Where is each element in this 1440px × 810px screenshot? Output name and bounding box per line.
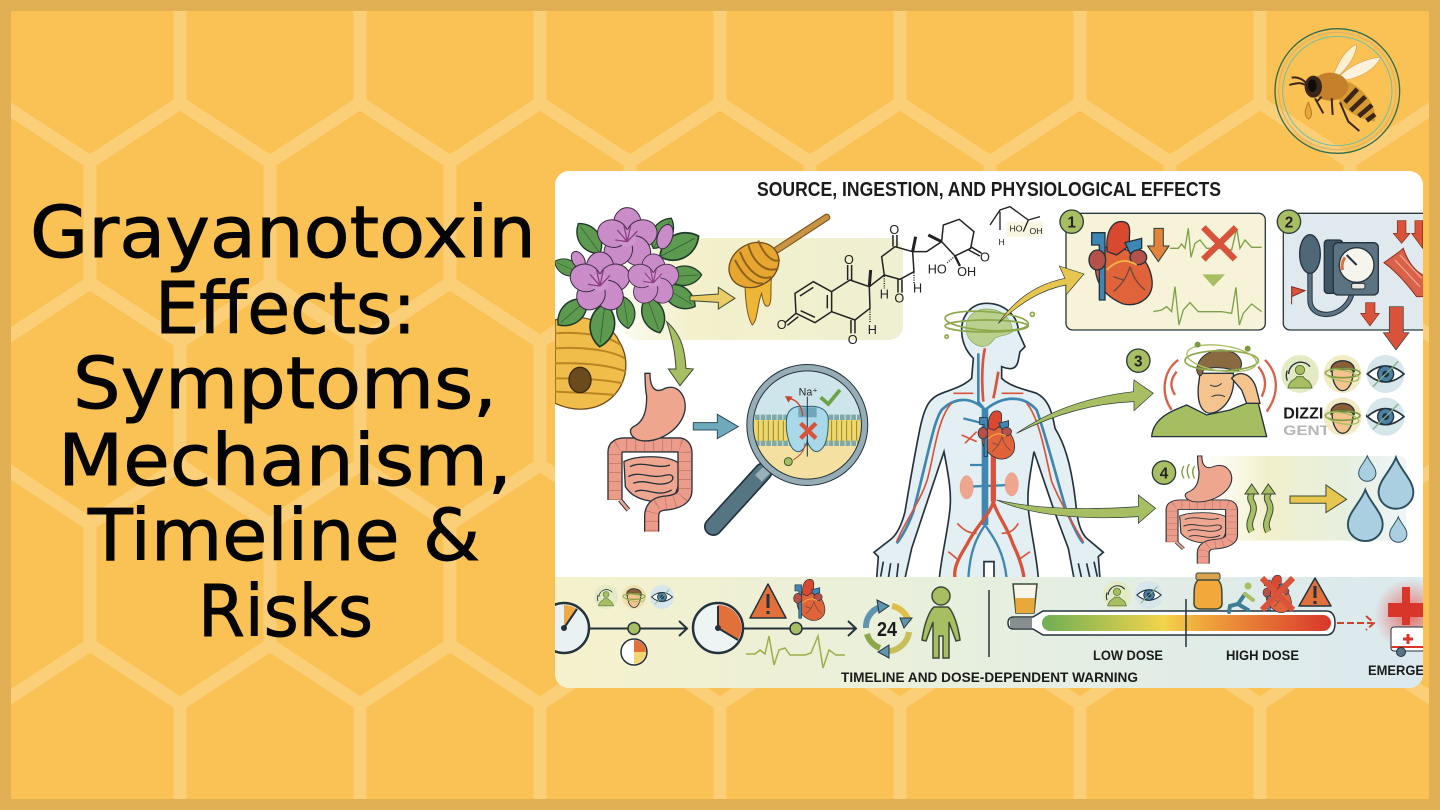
emergency icon [1374,579,1440,656]
labels: EMERGE [1368,662,1424,678]
nausea waves [1182,464,1195,478]
hand fingers [881,562,1097,578]
timeline dot 2 [790,622,802,634]
recovered person [922,587,960,658]
small chemical fragment: OH [1030,226,1042,236]
dashed emergency arrow [1337,616,1374,630]
title: Symptoms, [73,342,497,425]
ecg bottom [1153,287,1262,325]
timeline heart [794,579,825,620]
icon: magnifier with sodium channel: Na⁺ [799,387,818,399]
tube [1310,270,1352,314]
badge 2 [1277,210,1301,233]
badge 4 [1152,461,1176,484]
badge 3: 3 [1134,353,1143,370]
early symptom icons [594,585,674,609]
logo: bee in circle [1275,29,1400,153]
chemical labels: H [880,287,889,301]
timeline arrow 1 [590,621,687,636]
arrow: flower to honey [690,287,735,309]
gauge [1324,240,1343,293]
chemical labels: H [913,282,922,296]
wavy arrows [1245,484,1275,532]
bulb [1300,235,1320,273]
24 hour cycle: 24 [877,619,898,641]
small chemical fragment: HO [1010,224,1023,234]
body kidneys [960,473,1018,499]
chemical labels: O [894,292,904,306]
icon: digestive tract [615,373,685,532]
icon: rhododendron flowers [551,208,704,348]
yellow arrow [1290,485,1347,513]
body heart [978,411,1015,459]
panel 1: heart rate [1066,213,1265,330]
arrow: body to gut [997,495,1156,523]
symptom label fragments: & [1365,405,1375,421]
chemical labels: O [980,250,990,264]
chemical structure: grayanotoxin [785,219,982,333]
symptom label fragments [1283,405,1375,438]
chemical labels: H [868,323,877,337]
small chemical fragment: H [999,237,1005,247]
chemical labels: O [889,223,899,237]
badge 1: 1 [1067,214,1076,231]
symptom icons second row [1324,398,1405,436]
big down arrow [1383,307,1409,350]
dizziness halo [944,309,1034,338]
icon: glass of honey water [1013,584,1037,613]
red cross [1203,227,1236,259]
small pie clock [621,639,647,665]
title: Effects: [155,267,416,350]
blood vessels [897,348,1083,578]
muscle [1384,248,1427,297]
arrow: flower to stomach [667,322,693,386]
arrow: body to dizziness [1017,380,1153,433]
icon: collapsing person [1229,582,1253,612]
brain [966,309,1013,347]
symptom label fragments: DIZZI [1283,405,1323,422]
chemical labels: OH [957,265,976,279]
icon: intestines small [1172,456,1232,564]
human body figure [874,303,1103,578]
icon: magnifier with sodium channel [713,368,865,527]
heading: source ingestion physiological effects: SOURCE, INGESTION, AND PHYSIOLOGICAL EFFECTS [757,179,1221,201]
warning triangle [750,584,786,618]
source and mechanism illustrations [551,208,990,532]
dose divider [1185,599,1187,647]
icon: heart [1089,222,1152,305]
illustration: dizzy person [1152,341,1276,437]
symptom label fragments: GENT [1283,422,1330,438]
title: Grayanotoxin [30,191,536,274]
clock 1 [539,603,589,653]
badge 4: 4 [1160,465,1169,482]
small chemical fragment [990,207,1043,247]
body silhouette [874,303,1103,578]
warning triangle high dose [1299,578,1331,606]
title: Timeline & [87,494,480,577]
title: Risks [198,570,373,653]
chemical labels: O [777,318,787,332]
symptom icons [1281,355,1405,393]
dose thermometer [1008,611,1335,635]
flag [1292,287,1305,304]
icon: honey dipper [721,217,827,325]
title: Mechanism, [58,419,512,502]
chemical labels: O [848,333,858,347]
ecg top [1170,228,1262,257]
title [30,191,536,653]
down triangle [1202,274,1225,287]
icon: honey jar [1194,573,1222,609]
icon: beehive [555,317,626,409]
labels [841,647,1424,685]
divider [988,590,990,657]
badge 1 [1060,210,1083,233]
badge 3 [1127,349,1150,372]
panel: timeline and dose warning [539,573,1440,688]
badge 2: 2 [1285,214,1293,231]
arrow: gut to channel [693,414,738,439]
icon: heart crossed out [1262,575,1293,613]
water drops [1348,456,1413,542]
labels: LOW DOSE [1093,647,1163,663]
labels: TIMELINE AND DOSE-DEPENDENT WARNING [841,669,1138,685]
low dose icons [1103,581,1163,609]
timeline dot 1 [628,622,640,634]
red arrows [1393,221,1410,243]
panel 2: blood pressure [1283,213,1433,330]
timeline ecg [746,636,845,668]
panel 4: gastrointestinal [1207,456,1407,541]
source panel background [623,238,903,340]
labels: HIGH DOSE [1226,647,1299,663]
timeline arrow 2 [744,621,856,636]
24 hour cycle [866,600,912,658]
infographic card [539,171,1440,688]
effects illustrations [990,207,1433,564]
icon: down arrow [1148,228,1169,262]
clock 2 [693,603,743,653]
chemical labels: O [844,253,854,267]
arrow: brain to heart [998,266,1084,323]
chemical labels [777,223,990,347]
chemical labels: HO [928,262,947,276]
